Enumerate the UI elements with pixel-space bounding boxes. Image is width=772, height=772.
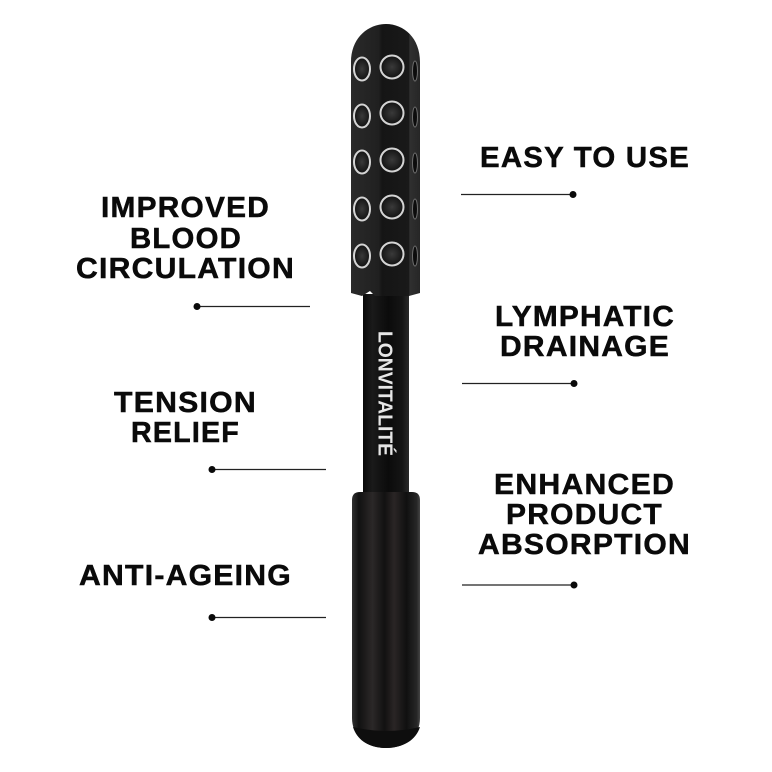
label: tension relief <box>114 387 326 473</box>
row 5 studs <box>354 242 404 268</box>
label: improved blood circulation <box>76 192 310 310</box>
roller shaft <box>363 294 409 494</box>
side studs <box>412 61 418 266</box>
label: improved blood circulation: CIRCULATION <box>76 253 295 285</box>
row 2 studs <box>354 102 404 128</box>
label: tension relief: TENSION <box>114 387 257 419</box>
row 4 studs <box>354 196 404 220</box>
label: easy to use <box>461 142 690 198</box>
label: lymphatic drainage: DRAINAGE <box>500 331 670 363</box>
brand name: LONVITALITÉ <box>374 331 396 456</box>
row 3 studs <box>354 148 404 174</box>
row 1 studs <box>354 56 404 80</box>
roller head <box>351 24 420 296</box>
label: lymphatic drainage: LYMPHATIC <box>495 301 675 333</box>
label: improved blood circulation: BLOOD <box>130 223 242 255</box>
label: tension relief: RELIEF <box>131 417 240 449</box>
label: enhanced product absorption: PRODUCT <box>506 499 663 531</box>
label: lymphatic drainage <box>462 301 675 387</box>
label: anti-ageing: ANTI-AGEING <box>79 560 292 592</box>
label: enhanced product absorption: ENHANCED <box>494 469 675 501</box>
handle end cap <box>353 727 420 748</box>
label: easy to use: EASY TO USE <box>480 142 690 174</box>
label: anti-ageing <box>79 560 326 621</box>
roller handle <box>352 492 420 748</box>
label: improved blood circulation: IMPROVED <box>101 192 270 224</box>
label: enhanced product absorption <box>462 469 691 588</box>
product: facial roller <box>351 24 420 748</box>
label: enhanced product absorption: ABSORPTION <box>478 529 691 561</box>
